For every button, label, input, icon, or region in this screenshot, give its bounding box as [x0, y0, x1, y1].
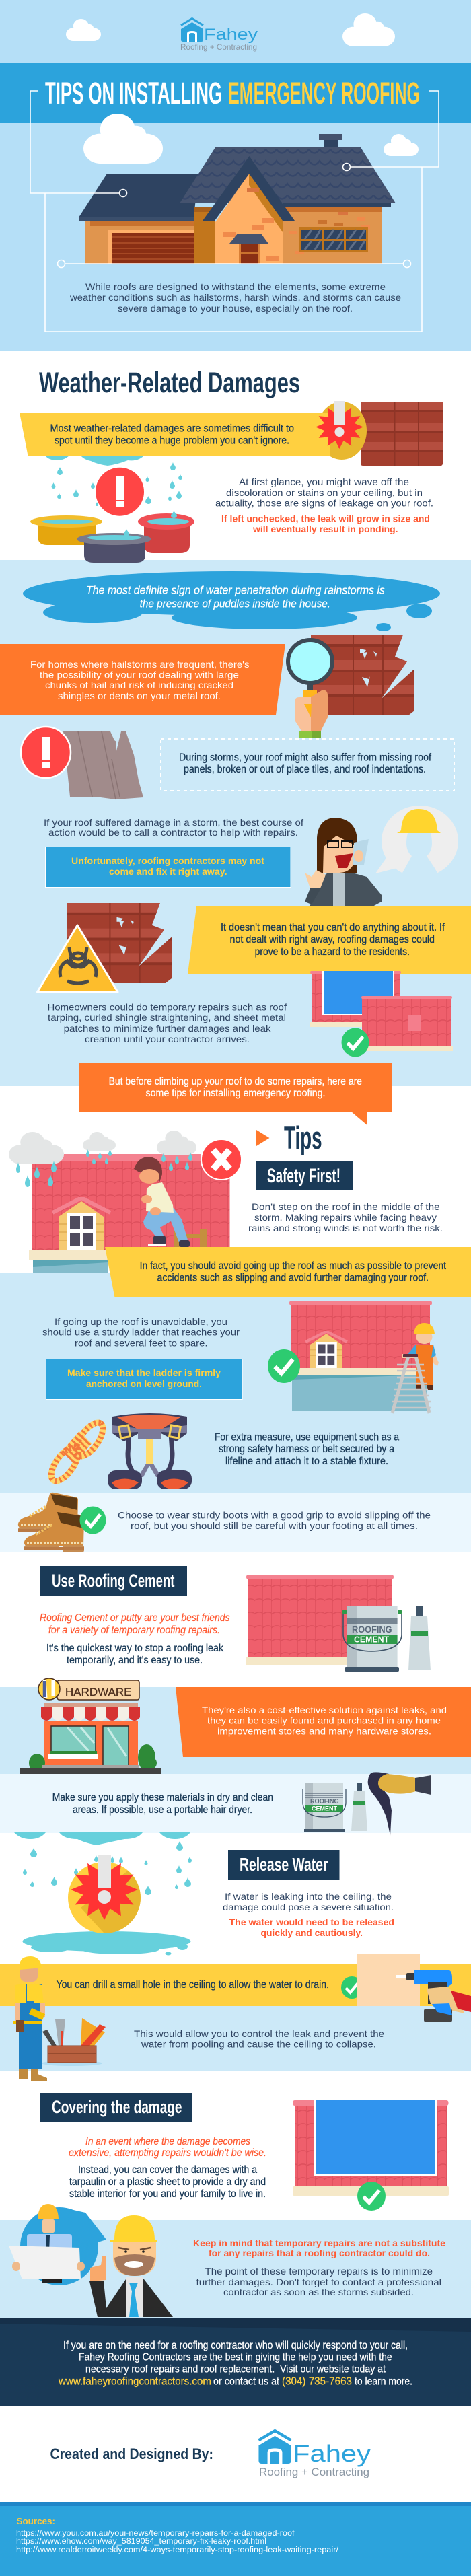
logo: Fahey footer: Fahey: [293, 2441, 371, 2467]
panel: call to action: necessary roof repairs and roof replacement. Visit our website today at: [85, 2364, 386, 2375]
text: do not step on roof: rains and strong winds is not worth the risk.: [248, 1223, 443, 1233]
callout: puddle: [23, 571, 440, 631]
illustration: boy on stormy roof: [9, 1131, 242, 1273]
heading: tips: Tips: [284, 1120, 322, 1155]
icon: cement can and tube: ROOFING: [310, 1798, 339, 1805]
text: cement red: for a variety of temporary roofing repairs.: [48, 1624, 220, 1636]
text: red warning: [221, 513, 430, 534]
panel: sources: Sources:: [16, 2516, 55, 2526]
text: created by: Created and Designed By:: [50, 2445, 213, 2462]
text: first glance: actuality, those are signs of leakage on your roof.: [215, 498, 433, 509]
icon: cement can and tube: CEMENT: [312, 1805, 337, 1813]
callout: cost-effective orange banner: they can be easily found and purchased in any home: [207, 1715, 441, 1726]
text: extensive damage: In an event where the damage becomes: [85, 2136, 250, 2147]
callout: cost-effective orange banner: improvement stores and many hardware stores.: [217, 1726, 431, 1737]
callout: orange speech banner: [79, 1063, 392, 1125]
section heading box: covering: [40, 2093, 192, 2122]
callout: dashed box: During storms, your roof might also suffer from missing roof: [179, 752, 431, 764]
callout: cost-effective orange banner: They're also a cost-effective solution against leaks, and: [202, 1705, 447, 1715]
illustration: roof with cement can and tube: [246, 1575, 431, 1672]
text: drill hole: You can drill a small hole in the ceiling to allow the water to drain.: [57, 1979, 329, 1991]
panel: safety first tips: [9, 1120, 471, 1552]
text: keep in mind: for any repairs that a roofing contractor could do.: [209, 2248, 430, 2258]
text: ladder: [42, 1316, 240, 1349]
callout: yellow banner: [20, 413, 330, 456]
logo: Fahey footer: Roofing + Contracting: [259, 2466, 369, 2478]
icon: cement can and tube: [303, 1783, 367, 1832]
text: ladder: roof and several feet to spare.: [75, 1338, 207, 1349]
logo: Fahey footer: [258, 2431, 371, 2478]
callout: yellow hazard banner: It doesn't mean that you can't do anything about it. If: [221, 922, 445, 933]
illustration: tarped roof: [293, 2100, 449, 2211]
text: temporary repairs: creation until your contractor arrives.: [85, 1034, 250, 1044]
text: extensive damage: [69, 2136, 266, 2159]
text: cement red: Roofing Cement or putty are your best friends: [40, 1612, 230, 1624]
text: extra measure: strong safety harness or belt secured by a: [219, 1443, 394, 1455]
illustration: roof with cement can and tube: CEMENT: [354, 1635, 389, 1645]
icon: leak and warning burst: [14, 1832, 192, 1956]
text: temporary repairs: [47, 1002, 287, 1044]
text: boots: [118, 1510, 431, 1531]
text: boots: roof, but you should still be careful with your footing at all times.: [131, 1520, 418, 1531]
icon: safety harness: [108, 1413, 192, 1489]
frame lines and markers: [30, 91, 439, 332]
text: point of repairs: The point of these temporary repairs is to minimize: [205, 2266, 433, 2277]
text: do not step on roof: Don't step on the roof in the middle of the: [252, 1201, 440, 1212]
callout: yellow banner: spot until they become a huge problem you can't ignore.: [55, 435, 289, 447]
callout: puddle: The most definite sign of water penetration during rainstorms is: [86, 584, 385, 597]
illustration: hardware store: [20, 1678, 161, 1774]
text: temporary repairs: Homeowners could do temporary repairs such as roof: [47, 1002, 287, 1013]
panel: light blue damage section: [0, 571, 471, 1125]
icon: yellow badge backdrop: [317, 402, 367, 460]
section heading box: covering: Covering the damage: [52, 2097, 182, 2117]
text: point of repairs: [196, 2266, 441, 2297]
callout: yellow banner: Most weather-related damages are sometimes difficult to: [50, 423, 294, 435]
callout: ladder note: Make sure that the ladder is firmly: [67, 1367, 221, 1378]
icon: check: [341, 1976, 363, 1999]
logo: Fahey header: [180, 19, 258, 52]
panel: sources: http://www.realdetroitweekly.com/4-ways-temporarily-stop-roofing-leak-waiting-repair/: [16, 2546, 339, 2554]
panel: call to action: Fahey Roofing Contractors are the best in giving the help you need with the: [79, 2352, 392, 2363]
panel: credits: [50, 2431, 371, 2478]
icon: rope: [46, 1419, 108, 1485]
text: leaking ceiling: If water is leaking into the ceiling, the: [225, 1891, 392, 1902]
text: ladder: If going up the roof is unavoidable, you: [55, 1316, 227, 1327]
callout: cost-effective orange banner: [176, 1687, 471, 1757]
callout: ladder note: [46, 1359, 242, 1400]
title: TIPS ON INSTALLING: [45, 76, 222, 110]
text: extra measure: lifeline and attach it to a stable fixture.: [225, 1456, 388, 1467]
text: release red: The water would need to be released: [229, 1917, 394, 1927]
callout: dashed box: panels, broken or out of place tiles, and roof indentations.: [184, 764, 426, 775]
callout: puddle: the presence of puddles inside the house.: [140, 598, 330, 610]
text: release red: quickly and cautiously.: [261, 1927, 363, 1938]
text: keep in mind: [193, 2238, 445, 2258]
panel: roofing cement: [20, 1566, 471, 1836]
logo: Fahey header: Fahey: [204, 26, 258, 44]
callout: hailstorms orange banner: the possibility of your roof dealing with large: [40, 670, 239, 680]
icon: boots: [18, 1493, 106, 1552]
illustration: worker with drill: [13, 1956, 47, 2081]
illustration: house: [79, 134, 396, 264]
callout: blue note: Unfortunately, roofing contractors may not: [71, 855, 264, 866]
text: extra measure: [215, 1432, 399, 1467]
callout: dashed box: [161, 739, 454, 791]
text: extensive damage: extensive, attempting repairs wouldn't be wise.: [69, 2147, 266, 2159]
text: temporary repairs: patches to minimize further damages and leak: [64, 1023, 272, 1034]
icon: damaged shingles alert: [21, 727, 143, 799]
panel: covering the damage: [9, 2093, 449, 2317]
callout: yellow avoid banner: [105, 1247, 471, 1297]
text: call a contractor: [44, 817, 303, 838]
panel: call to action: If you are on the need for a roofing contractor who will quickly respond to your call,: [63, 2340, 408, 2351]
text: do not step on roof: storm. Making repairs while facing heavy: [254, 1212, 437, 1223]
text: keep in mind: Keep in mind that temporary repairs are not a substitute: [193, 2238, 445, 2248]
section heading box: release water: [228, 1850, 339, 1880]
section heading box: safety first: Safety First!: [267, 1165, 340, 1187]
icon: hair dryer: [368, 1772, 431, 1836]
text: first glance: At first glance, you might wave off the: [239, 476, 409, 487]
heading: tips: [256, 1120, 322, 1155]
panel: sources: https://www.youi.com.au/youi-news/temporary-repairs-for-a-damaged-roof: [16, 2530, 295, 2538]
illustration: woman calling contractor: [305, 806, 458, 907]
text: temporary repairs: tarping, curled shingle straightening, and sheet metal: [48, 1012, 286, 1023]
text: tarpaulin: [69, 2164, 266, 2200]
callout: ladder note: anchored on level ground.: [86, 1378, 202, 1389]
text: call a contractor: If your roof suffered damage in a storm, the best course of: [44, 817, 303, 828]
panel: sources: https://www.ehow.com/way_5819054_temporary-fix-leaky-roof.html: [16, 2538, 266, 2546]
panel: call to action: www.faheyroofingcontractors.com: [58, 2376, 211, 2388]
callout: hailstorms orange banner: chunks of hail and risk of inducing cracked: [45, 680, 233, 690]
text: control the leak: water from pooling and cause the ceiling to collapse.: [141, 2039, 376, 2050]
text: tarpaulin: stable interior for you and your family to live in.: [69, 2188, 266, 2200]
panel: weather-related damages: [20, 367, 443, 563]
panel: sources: [16, 2516, 339, 2554]
text: quickest way: temporarily, and it's easy to use.: [67, 1655, 203, 1666]
icon: biohazard on cracked tile: [38, 903, 172, 992]
intro text: weather conditions such as hailstorms, harsh winds, and storms can cause: [69, 292, 401, 303]
text: extra measure: For extra measure, use equipment such as a: [215, 1432, 399, 1443]
text: leaking ceiling: [223, 1891, 394, 1912]
callout: orange speech banner: But before climbing up your roof to do some repairs, here are: [109, 1076, 362, 1087]
illustration: engineer with blueprint: [9, 2204, 106, 2285]
text: first glance: discoloration or stains on your ceiling, but in: [226, 487, 423, 498]
callout: hailstorms orange banner: shingles or dents on your metal roof.: [58, 690, 221, 701]
callout: hailstorms orange banner: For homes where hailstorms are frequent, there's: [30, 659, 249, 670]
text: point of repairs: contractor as soon as the storms subsided.: [223, 2287, 414, 2297]
text: release red: [229, 1917, 394, 1938]
text: dry and clean: [52, 1792, 273, 1816]
text: call a contractor: action would be to call a contractor to help with repairs.: [48, 827, 298, 838]
illustration: hardware store: HARDWARE: [65, 1686, 132, 1698]
icon: red tiles: [361, 402, 443, 466]
panel: call to action: to learn more.: [355, 2376, 412, 2388]
intro text: severe damage to your house, especially on the roof.: [118, 303, 353, 314]
section heading box: safety first: [256, 1161, 353, 1190]
callout: yellow hazard banner: [188, 906, 471, 974]
panel: call to action: (304) 735-7663: [282, 2376, 352, 2388]
text: red warning: will eventually result in ponding.: [252, 524, 398, 534]
callout: orange speech banner: some tips for installing emergency roofing.: [145, 1087, 326, 1099]
text: quickest way: [46, 1643, 224, 1666]
illustration: worker on ladder at roof: [268, 1301, 439, 1413]
illustration: toolbox: [42, 2018, 106, 2066]
illustration: tarped roofs: [310, 971, 453, 1057]
text: first glance: [215, 476, 433, 509]
callout: yellow hazard banner: prove to be a hazard to the residents.: [255, 946, 410, 958]
icon: cracked tiles and magnifier: [286, 635, 414, 738]
illustration: ceiling and drill: [357, 1954, 471, 2022]
text: boots: Choose to wear sturdy boots with a good grip to avoid slipping off the: [118, 1510, 431, 1521]
panel: call to action: [58, 2340, 412, 2388]
panel: call to action: or contact us at: [213, 2376, 279, 2388]
panel: hero: [0, 13, 471, 332]
text: tarpaulin: Instead, you can cover the damages with a: [78, 2164, 257, 2176]
callout: yellow hazard banner: not dealt with right away, roofing damages could: [230, 934, 435, 945]
text: control the leak: This would allow you to control the leak and prevent the: [134, 2028, 384, 2039]
callout: hailstorms orange banner: [0, 644, 285, 715]
text: ladder: should use a sturdy ladder that reaches your: [42, 1327, 240, 1338]
section heading box: roofing cement: Use Roofing Cement: [52, 1571, 174, 1591]
text: tarpaulin: tarpaulin or a plastic sheet to provide a dry and: [69, 2176, 266, 2188]
section heading box: roofing cement: [40, 1566, 187, 1596]
text: do not step on roof: [248, 1201, 443, 1233]
text: control the leak: [134, 2028, 384, 2050]
text: dry and clean: areas. If possible, use a portable hair dryer.: [73, 1804, 252, 1816]
text: red warning: If left unchecked, the leak will grow in size and: [221, 513, 430, 524]
logo: Fahey header: Roofing + Contracting: [180, 42, 257, 52]
intro text: [69, 281, 401, 314]
callout: yellow avoid banner: accidents such as slipping and avoid further damaging your roof.: [157, 1273, 429, 1284]
clouds: [0, 13, 471, 164]
panel: release water: [13, 1832, 471, 2081]
illustration: roof with cement can and tube: ROOFING: [352, 1624, 392, 1635]
text: leaking ceiling: damage could pose a severe situation.: [223, 1902, 394, 1912]
heading: Weather-Related Damages: [39, 367, 300, 399]
intro text: While roofs are designed to withstand the elements, some extreme: [85, 281, 386, 292]
illustration: contractor pointing: [89, 2215, 173, 2317]
text: cement red: [40, 1612, 230, 1636]
text: point of repairs: further damages. Don't forget to contact a professional: [196, 2277, 441, 2287]
icon: warning burst: [316, 401, 363, 449]
callout: blue note: [46, 847, 291, 887]
icon: leaking water and buckets: [30, 456, 194, 563]
section heading box: release water: Release Water: [240, 1854, 328, 1875]
text: quickest way: It's the quickest way to stop a roofing leak: [46, 1643, 224, 1654]
callout: blue note: come and fix it right away.: [109, 866, 227, 877]
text: dry and clean: Make sure you apply these materials in dry and clean: [52, 1792, 273, 1803]
